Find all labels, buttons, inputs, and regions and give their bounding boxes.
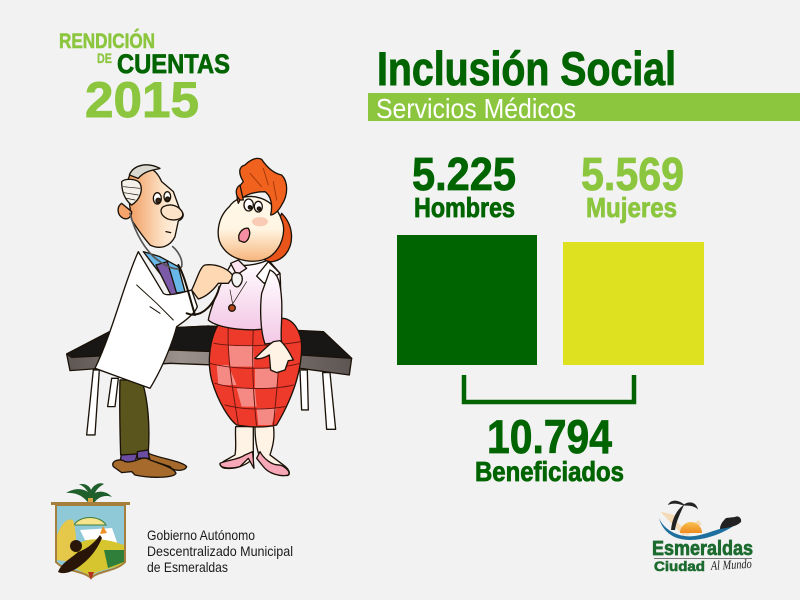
event logo: Rendición de Cuentas 2015: CUENTAS (117, 49, 230, 79)
illustration: doctor examining patient (67, 158, 352, 477)
icon: examination table (67, 326, 352, 435)
metric: Mujeres: Mujeres (586, 192, 677, 223)
subtitle band (368, 93, 800, 124)
logo: Esmeraldas Ciudad Al Mundo: Esmeraldas (652, 538, 753, 560)
event logo: Rendición de Cuentas 2015 (59, 29, 230, 128)
logo: Esmeraldas Ciudad Al Mundo: Al Mundo (710, 556, 752, 573)
organisation name: de Esmeraldas (147, 559, 228, 575)
icon: doctor (95, 165, 242, 477)
organisation name: Gobierno Autónomo (147, 527, 255, 543)
metric: Mujeres: 5.569 (581, 148, 684, 200)
bar: Hombres (397, 235, 537, 365)
metric: Hombres (412, 148, 516, 223)
metric: total beneficiados: Beneficiados (475, 456, 624, 487)
metric: total beneficiados (475, 410, 624, 487)
event logo: Rendición de Cuentas 2015: DE (97, 50, 112, 66)
metric: Hombres: Hombres (414, 192, 515, 223)
subtitle band: Servicios Médicos (376, 93, 576, 124)
icon: municipal coat of arms (51, 483, 130, 580)
icon: patient (208, 158, 302, 476)
metric: total beneficiados: 10.794 (487, 410, 612, 463)
bar: Mujeres (563, 242, 704, 365)
organisation name (147, 527, 293, 575)
event logo: Rendición de Cuentas 2015: RENDICIÓN (59, 29, 155, 53)
metric: Hombres: 5.225 (412, 148, 516, 200)
metric: Mujeres (581, 148, 684, 223)
logo: Esmeraldas Ciudad Al Mundo: Ciudad (654, 558, 705, 574)
bracket connector (464, 375, 634, 402)
title: Inclusión Social (377, 42, 676, 95)
logo: Esmeraldas Ciudad Al Mundo (652, 501, 753, 574)
organisation name: Descentralizado Municipal (147, 543, 293, 559)
event logo: Rendición de Cuentas 2015: 2015 (85, 72, 199, 128)
